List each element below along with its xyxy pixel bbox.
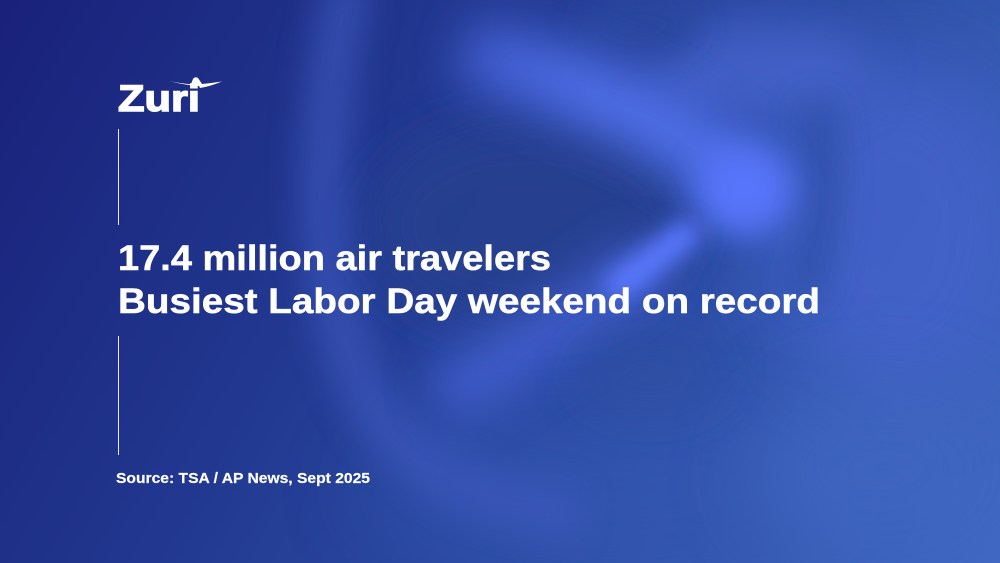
headline [118, 239, 820, 321]
logo icon: plane [169, 77, 222, 88]
logo: Zuri wordmark with plane [118, 77, 222, 119]
divider line: lower [118, 336, 119, 455]
logo wordmark: Zuri [118, 78, 200, 119]
divider line: upper [118, 129, 119, 225]
source note: Source: TSA / AP News, Sept 2025 [116, 470, 370, 487]
headline line 1: 17.4 million air travelers [118, 239, 551, 278]
headline line 2: Busiest Labor Day weekend on record [118, 282, 820, 321]
